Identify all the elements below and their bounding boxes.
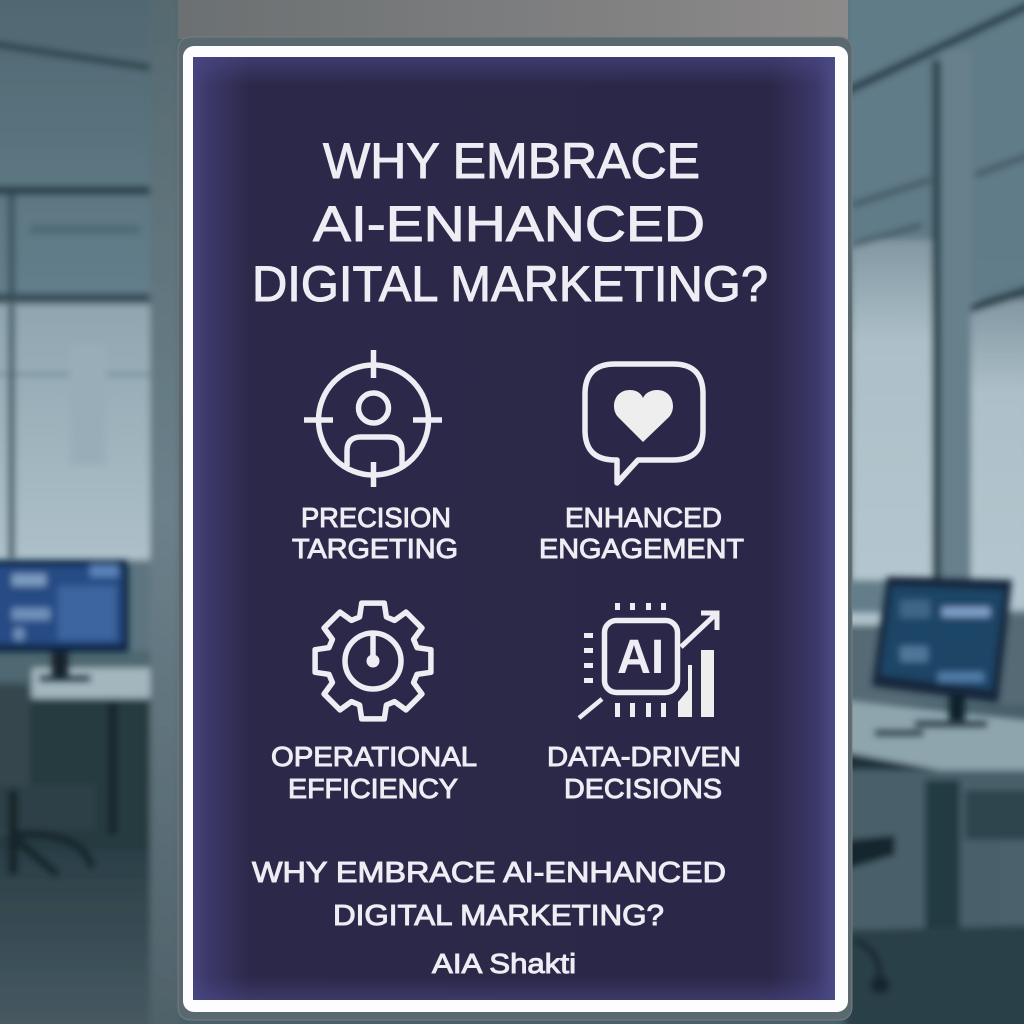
- heading: WHY EMBRACE: [323, 133, 700, 189]
- label: operational efficiency: [271, 741, 477, 804]
- icon: AI chip with growth chart: AI: [617, 631, 664, 684]
- background: blurred office, right side: [845, 0, 1024, 705]
- panel frame: [178, 37, 852, 1020]
- label: data-driven decisions: [547, 741, 741, 804]
- label: precision targeting: PRECISION: [301, 502, 451, 533]
- footer text: WHY EMBRACE AI-ENHANCED: [252, 857, 726, 889]
- panel glow: [193, 57, 835, 1000]
- label: precision targeting: [292, 502, 458, 564]
- heading: AI-ENHANCED: [313, 196, 705, 252]
- icon: target with person: [304, 350, 442, 487]
- icon: speech bubble with heart: [585, 364, 703, 483]
- label: data-driven decisions: DECISIONS: [564, 773, 722, 804]
- label: precision targeting: TARGETING: [292, 533, 458, 564]
- label: data-driven decisions: DATA-DRIVEN: [547, 741, 741, 772]
- label: operational efficiency: OPERATIONAL: [271, 741, 477, 772]
- label: enhanced engagement: [539, 502, 744, 564]
- icon: AI chip with growth chart: [579, 603, 717, 718]
- label: enhanced engagement: ENGAGEMENT: [539, 533, 744, 564]
- credit: AIA Shakti: AIA Shakti: [432, 948, 576, 979]
- label: operational efficiency: EFFICIENCY: [288, 773, 458, 804]
- background: blurred office, left side: [0, 0, 180, 1024]
- footer text: DIGITAL MARKETING?: [333, 900, 664, 932]
- display panel: [178, 37, 852, 1020]
- heading: [252, 133, 768, 312]
- background monitor, left: [0, 560, 128, 681]
- panel white border: [183, 46, 848, 1012]
- label: enhanced engagement: ENHANCED: [565, 502, 722, 533]
- icon: gear with gauge: [315, 603, 431, 719]
- background monitor, right: [872, 577, 1012, 736]
- heading: DIGITAL MARKETING?: [252, 256, 768, 312]
- top mounting strip: [178, 0, 848, 39]
- panel face: [193, 57, 835, 1000]
- background desk and floor, right: [845, 700, 1024, 1024]
- footer text: [252, 857, 726, 932]
